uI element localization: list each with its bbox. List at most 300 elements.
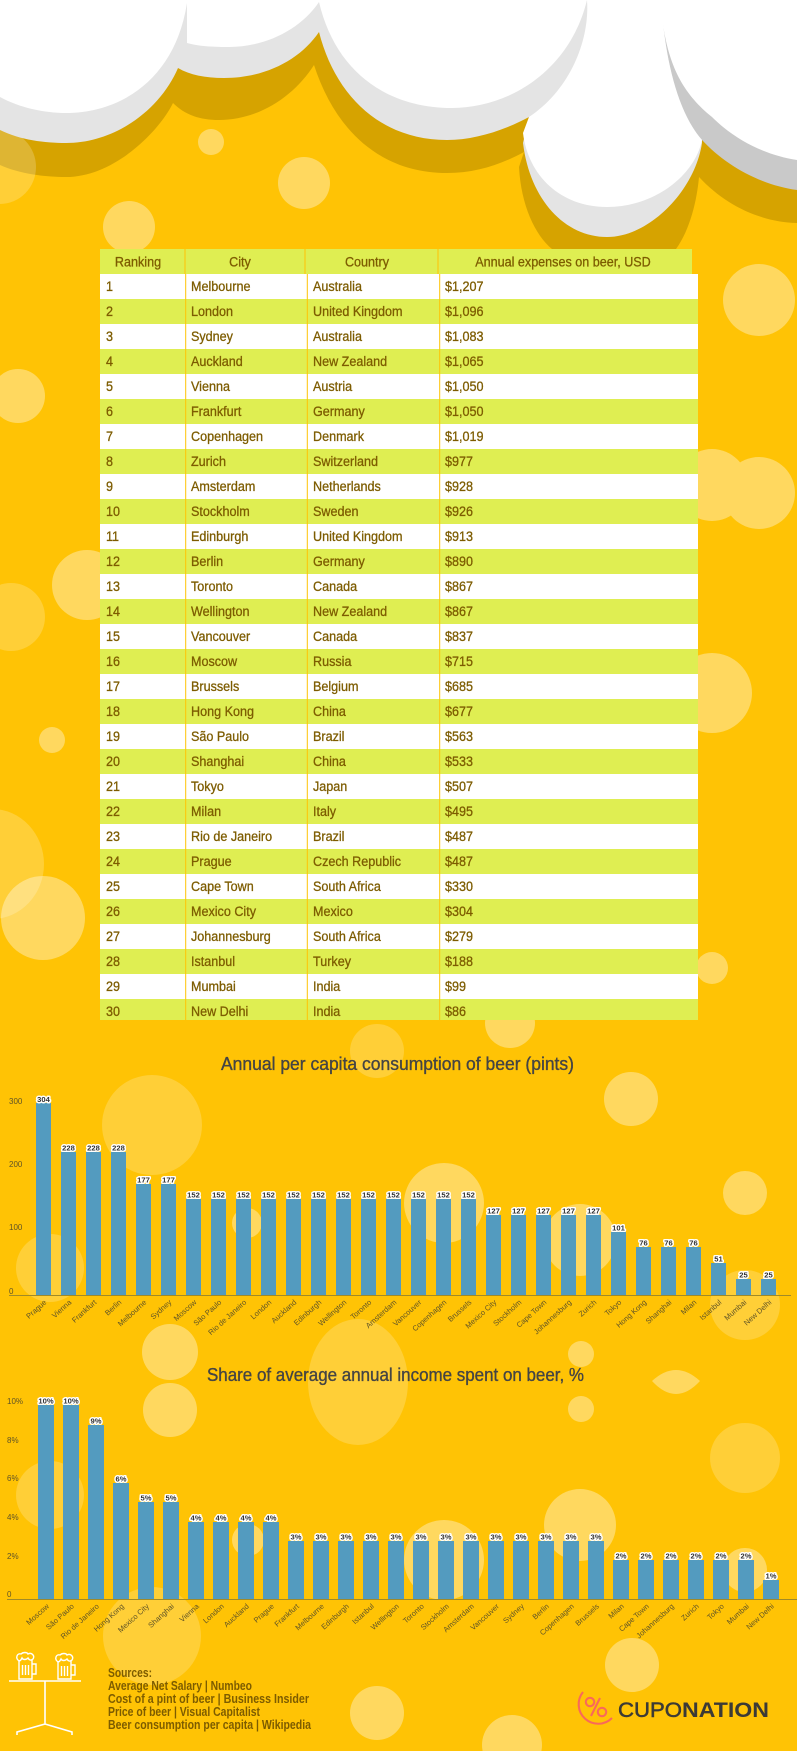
value labels: 152 — [412, 1190, 425, 1200]
row 9: Netherlands — [313, 478, 381, 494]
row 27 — [100, 924, 698, 949]
row 8: Switzerland — [313, 453, 378, 469]
y axis ticks: 10% — [7, 1397, 23, 1406]
value labels: 5% — [166, 1494, 177, 1502]
row 25: $330 — [445, 878, 473, 894]
table header: Annual expenses on beer, USD — [475, 254, 651, 270]
value labels: 25 — [764, 1270, 773, 1280]
city labels: Rio de Janeiro — [59, 1602, 101, 1641]
value labels: 152 — [212, 1190, 225, 1200]
value labels: 2% — [666, 1552, 677, 1560]
value labels: 2% — [691, 1552, 702, 1560]
value labels: 152 — [312, 1190, 325, 1200]
value labels: 3% — [466, 1532, 477, 1542]
row 21: $507 — [445, 778, 473, 794]
row 3: Sydney — [191, 328, 233, 344]
row 12 — [100, 549, 698, 574]
row 26: 26 — [106, 903, 120, 919]
row 6: Frankfurt — [191, 403, 242, 419]
city labels: Toronto — [349, 1298, 373, 1321]
city labels: Melbourne — [293, 1602, 326, 1632]
row 25 — [100, 874, 698, 899]
city labels: Frankfurt — [70, 1297, 99, 1325]
row 24: $487 — [445, 853, 473, 869]
row 3: 3 — [106, 328, 113, 344]
row 13 — [100, 574, 698, 599]
table header — [100, 249, 692, 274]
row 13: 13 — [106, 578, 120, 594]
row 4: $1,065 — [445, 353, 483, 369]
sources text — [108, 1666, 312, 1732]
row 20: 20 — [106, 753, 120, 769]
city labels: Hong Kong — [614, 1298, 648, 1330]
value labels: 10% — [63, 1396, 79, 1406]
row 30: 30 — [106, 1003, 120, 1019]
y axis ticks — [7, 1397, 23, 1599]
icon: percent smile — [579, 1692, 612, 1724]
row 28: 28 — [106, 953, 120, 969]
row 17: $685 — [445, 678, 473, 694]
row 12: $890 — [445, 553, 473, 569]
row 4: 4 — [106, 353, 113, 369]
row 29: $99 — [445, 978, 466, 994]
row 19: $563 — [445, 728, 473, 744]
city labels: Amsterdam — [441, 1602, 476, 1634]
row 15: Vancouver — [191, 628, 251, 644]
city labels: São Paulo — [44, 1602, 76, 1632]
row 14: Wellington — [191, 603, 250, 619]
row 29: India — [313, 978, 341, 994]
row 5 — [100, 374, 698, 399]
city labels: Zurich — [679, 1602, 701, 1622]
value labels: 9% — [91, 1416, 102, 1426]
row 27: South Africa — [313, 928, 381, 944]
value labels: 152 — [437, 1190, 450, 1200]
row 6: $1,050 — [445, 403, 483, 419]
chart title: share of income: Share of average annual income spent on beer, % — [207, 1364, 584, 1385]
value labels — [37, 1095, 773, 1280]
row 25: 25 — [106, 878, 120, 894]
row 3: $1,083 — [445, 328, 483, 344]
value labels: 6% — [116, 1474, 127, 1484]
value labels: 152 — [362, 1190, 375, 1200]
row 14: 14 — [106, 603, 120, 619]
city labels: Wellington — [316, 1298, 348, 1328]
city labels: Stockholm — [491, 1298, 523, 1328]
row 26: Mexico City — [191, 903, 256, 919]
value labels: 3% — [566, 1532, 577, 1542]
city labels: Copenhagen — [538, 1602, 576, 1637]
row 28: Turkey — [313, 953, 351, 969]
row 1: $1,207 — [445, 278, 483, 294]
chart title: annual per capita consumption: Annual per capita consumption of beer (pints) — [221, 1053, 574, 1074]
row 19: Brazil — [313, 728, 344, 744]
row 29: Mumbai — [191, 978, 236, 994]
row 14 — [100, 599, 698, 624]
city labels: Milan — [606, 1602, 626, 1620]
row 23: $487 — [445, 828, 473, 844]
city labels: Edinburgh — [319, 1602, 351, 1631]
row 9: Amsterdam — [191, 478, 255, 494]
row 12: Germany — [313, 553, 365, 569]
city labels: Hong Kong — [92, 1602, 126, 1634]
row 23: Brazil — [313, 828, 344, 844]
row 20: $533 — [445, 753, 473, 769]
row 1: Melbourne — [191, 278, 250, 294]
row 16 — [100, 649, 698, 674]
row 5: Austria — [313, 378, 353, 394]
city labels: Mexico City — [116, 1602, 151, 1634]
row 13: $867 — [445, 578, 473, 594]
city labels: Vancouver — [391, 1297, 424, 1328]
value labels: 10% — [38, 1396, 54, 1406]
row 15: $837 — [445, 628, 473, 644]
city labels: Istanbul — [350, 1602, 376, 1626]
row 13: Toronto — [191, 578, 233, 594]
row 16: 16 — [106, 653, 120, 669]
row 10: 10 — [106, 503, 120, 519]
table header: Ranking — [115, 254, 161, 270]
y axis ticks: 6% — [7, 1474, 19, 1483]
row 18: 18 — [106, 703, 120, 719]
row 10: $926 — [445, 503, 473, 519]
value labels: 4% — [266, 1514, 277, 1522]
y axis ticks: 100 — [9, 1223, 23, 1232]
row 1: Australia — [313, 278, 363, 294]
city labels: Brussels — [446, 1298, 474, 1324]
row 21: Tokyo — [191, 778, 224, 794]
row 16: Moscow — [191, 653, 238, 669]
city labels: Edinburgh — [292, 1298, 323, 1327]
row 12: Berlin — [191, 553, 223, 569]
row 3: Australia — [313, 328, 363, 344]
sources text: Price of beer | Visual Capitalist — [108, 1705, 261, 1719]
city labels: Frankfurt — [273, 1601, 302, 1629]
city labels: Vienna — [178, 1601, 201, 1624]
row 24: Prague — [191, 853, 232, 869]
row 6: 6 — [106, 403, 113, 419]
row 19: 19 — [106, 728, 120, 744]
row 24: 24 — [106, 853, 120, 869]
value labels: 76 — [664, 1238, 673, 1248]
row 15: 15 — [106, 628, 120, 644]
row 8 — [100, 449, 698, 474]
row 16: Russia — [313, 653, 352, 669]
bars — [38, 1405, 779, 1599]
row 23 — [100, 824, 698, 849]
value labels: 51 — [714, 1254, 723, 1264]
value labels: 152 — [237, 1190, 250, 1200]
city labels: Cape Town — [617, 1602, 651, 1634]
row 18: Hong Kong — [191, 703, 254, 719]
city labels: Brussels — [573, 1602, 601, 1628]
row 11: 11 — [106, 528, 119, 544]
value labels: 3% — [416, 1532, 427, 1542]
row 9 — [100, 474, 698, 499]
row 15: Canada — [313, 628, 358, 644]
row 11: United Kingdom — [313, 528, 403, 544]
city labels: São Paulo — [192, 1298, 223, 1328]
city labels: Shanghai — [146, 1602, 176, 1630]
row 5: Vienna — [191, 378, 231, 394]
row 1: 1 — [106, 278, 113, 294]
row 26: Mexico — [313, 903, 353, 919]
city labels: Stockholm — [419, 1602, 451, 1632]
value labels: 3% — [341, 1532, 352, 1542]
value labels: 3% — [291, 1532, 302, 1542]
row 27: Johannesburg — [191, 928, 271, 944]
city labels: New Delhi — [744, 1602, 776, 1631]
value labels: 127 — [587, 1206, 600, 1216]
city labels: Melbourne — [116, 1298, 148, 1328]
sources text: Sources: — [108, 1666, 152, 1680]
row 7: $1,019 — [445, 428, 483, 444]
row 2: United Kingdom — [313, 303, 403, 319]
city labels: Toronto — [401, 1602, 426, 1625]
city labels: Berlin — [103, 1298, 123, 1317]
value labels: 76 — [689, 1238, 698, 1248]
value labels: 2% — [616, 1552, 627, 1560]
city labels: Milan — [679, 1298, 698, 1316]
icon: table with beer mugs — [9, 1652, 81, 1735]
y axis ticks — [9, 1097, 23, 1296]
row 12: 12 — [106, 553, 120, 569]
row 2 — [100, 299, 698, 324]
row 28: $188 — [445, 953, 473, 969]
value labels: 228 — [112, 1144, 125, 1152]
row 30: $86 — [445, 1003, 466, 1019]
row 21: Japan — [313, 778, 347, 794]
row 9: $928 — [445, 478, 473, 494]
value labels: 4% — [241, 1514, 252, 1522]
row 4: Auckland — [191, 353, 243, 369]
value labels — [38, 1396, 777, 1580]
row 6 — [100, 399, 698, 424]
value labels: 25 — [739, 1270, 748, 1280]
value labels: 152 — [187, 1190, 200, 1200]
y axis ticks: 2% — [7, 1552, 19, 1561]
row 20: China — [313, 753, 346, 769]
value labels: 152 — [287, 1190, 300, 1200]
city labels: Vienna — [50, 1297, 74, 1320]
city labels: Vancouver — [469, 1601, 501, 1632]
row 11: $913 — [445, 528, 473, 544]
row 18 — [100, 699, 698, 724]
row 22: $495 — [445, 803, 473, 819]
row 28 — [100, 949, 698, 974]
city labels — [24, 1601, 776, 1641]
beer foam at top — [0, 0, 797, 260]
city labels: New Delhi — [742, 1298, 774, 1327]
row 8: Zurich — [191, 453, 226, 469]
y axis ticks: 8% — [7, 1436, 19, 1445]
row 20 — [100, 749, 698, 774]
value labels: 152 — [387, 1190, 400, 1200]
table header: City — [229, 254, 251, 270]
row 14: $867 — [445, 603, 473, 619]
row 11 — [100, 524, 698, 549]
value labels: 152 — [337, 1190, 350, 1200]
row 17: Belgium — [313, 678, 358, 694]
row 19 — [100, 724, 698, 749]
row 25: Cape Town — [191, 878, 254, 894]
row 4: New Zealand — [313, 353, 387, 369]
city labels: Tokyo — [705, 1602, 726, 1622]
row 2: $1,096 — [445, 303, 483, 319]
row 30: India — [313, 1003, 341, 1019]
row 7: Denmark — [313, 428, 364, 444]
icon: beer mug 2 — [56, 1654, 75, 1679]
row 10: Sweden — [313, 503, 358, 519]
row 6: Germany — [313, 403, 365, 419]
row 22: Italy — [313, 803, 336, 819]
value labels: 228 — [87, 1144, 100, 1152]
row 24: Czech Republic — [313, 853, 401, 869]
value labels: 76 — [639, 1238, 648, 1248]
row 23: Rio de Janeiro — [191, 828, 272, 844]
city labels: Mumbai — [722, 1298, 749, 1322]
row 5: 5 — [106, 378, 113, 394]
row 26: $304 — [445, 903, 473, 919]
city labels: Auckland — [222, 1602, 251, 1629]
sources text: Beer consumption per capita | Wikipedia — [108, 1718, 312, 1732]
sources text: Cost of a pint of beer | Business Insider — [108, 1692, 309, 1706]
row 29: 29 — [106, 978, 120, 994]
table header: Country — [345, 254, 389, 270]
y axis ticks: 300 — [9, 1097, 23, 1106]
city labels: Istanbul — [698, 1298, 724, 1322]
value labels: 177 — [162, 1176, 175, 1184]
row 14: New Zealand — [313, 603, 387, 619]
value labels: 2% — [641, 1552, 652, 1560]
value labels: 3% — [541, 1532, 552, 1542]
logo: Cuponation — [579, 1692, 769, 1724]
row 15 — [100, 624, 698, 649]
city labels: Zurich — [577, 1298, 598, 1318]
city labels: Cape Town — [515, 1298, 548, 1330]
city labels: London — [201, 1602, 226, 1625]
row 22 — [100, 799, 698, 824]
city labels: Mexico City — [464, 1298, 499, 1330]
row 18: China — [313, 703, 346, 719]
row 4 — [100, 349, 698, 374]
row 8: $977 — [445, 453, 473, 469]
city labels: Berlin — [531, 1602, 551, 1621]
row 7: 7 — [106, 428, 113, 444]
value labels: 4% — [191, 1514, 202, 1522]
value labels: 177 — [137, 1176, 150, 1184]
row 24 — [100, 849, 698, 874]
city labels: Sydney — [149, 1298, 174, 1321]
value labels: 304 — [37, 1095, 51, 1104]
value labels: 3% — [516, 1532, 527, 1542]
city labels: Johannesburg — [532, 1298, 573, 1336]
row 9: 9 — [106, 478, 113, 494]
row 17: 17 — [106, 678, 120, 694]
city labels: Moscow — [24, 1601, 51, 1627]
value labels: 2% — [741, 1552, 752, 1560]
value labels: 2% — [716, 1552, 727, 1560]
y axis ticks: 4% — [7, 1513, 19, 1522]
row 18: $677 — [445, 703, 473, 719]
city labels: Auckland — [269, 1298, 298, 1325]
value labels: 5% — [141, 1494, 152, 1502]
sources text: Average Net Salary | Numbeo — [108, 1679, 252, 1693]
city labels: Wellington — [369, 1602, 401, 1632]
row 11: Edinburgh — [191, 528, 248, 544]
row 26 — [100, 899, 698, 924]
bar chart: pints per capita — [9, 1095, 791, 1337]
row 2: London — [191, 303, 233, 319]
ranking table — [100, 249, 698, 1020]
bar chart: share of income — [7, 1396, 797, 1641]
city labels: Tokyo — [603, 1298, 623, 1318]
value labels: 4% — [216, 1514, 227, 1522]
city labels: Johannesburg — [634, 1602, 676, 1640]
row 22: 22 — [106, 803, 120, 819]
value labels: 3% — [366, 1532, 377, 1542]
row 7 — [100, 424, 698, 449]
city labels — [24, 1297, 774, 1337]
city labels: Prague — [24, 1298, 48, 1321]
row 30: New Delhi — [191, 1003, 248, 1019]
value labels: 3% — [491, 1532, 502, 1542]
row 8: 8 — [106, 453, 113, 469]
row 29 — [100, 974, 698, 999]
value labels: 127 — [537, 1206, 550, 1216]
logo: Cuponation: NATION — [682, 1699, 769, 1722]
row 25: South Africa — [313, 878, 381, 894]
row 10 — [100, 499, 698, 524]
value labels: 152 — [262, 1190, 275, 1200]
value labels: 127 — [562, 1206, 575, 1216]
y axis ticks: 0 — [7, 1590, 12, 1599]
value labels: 127 — [487, 1206, 500, 1216]
logo: Cuponation: CUPO — [618, 1699, 682, 1722]
row 30 — [100, 999, 698, 1020]
row 19: São Paulo — [191, 728, 249, 744]
city labels: Sydney — [501, 1602, 526, 1625]
city labels: Mumbai — [725, 1602, 751, 1626]
value labels: 1% — [766, 1572, 777, 1580]
row 17: Brussels — [191, 678, 240, 694]
row 28: Istanbul — [191, 953, 235, 969]
value labels: 3% — [441, 1532, 452, 1542]
value labels: 3% — [391, 1532, 402, 1542]
row 13: Canada — [313, 578, 358, 594]
city labels: Shanghai — [644, 1298, 674, 1326]
value labels: 228 — [62, 1144, 75, 1152]
value labels: 152 — [462, 1190, 475, 1200]
city labels: London — [249, 1298, 273, 1321]
row 10: Stockholm — [191, 503, 250, 519]
city labels: Amsterdam — [364, 1298, 398, 1330]
value labels: 3% — [316, 1532, 327, 1542]
row 22: Milan — [191, 803, 221, 819]
row 1 — [100, 274, 698, 299]
row 16: $715 — [445, 653, 473, 669]
icon: beer mug 1 — [17, 1652, 36, 1679]
row 21: 21 — [106, 778, 120, 794]
y axis ticks: 200 — [9, 1160, 23, 1169]
row 20: Shanghai — [191, 753, 244, 769]
bars — [36, 1103, 776, 1295]
row 7: Copenhagen — [191, 428, 263, 444]
row 23: 23 — [106, 828, 120, 844]
city labels: Copenhagen — [410, 1298, 448, 1333]
row 5: $1,050 — [445, 378, 483, 394]
row 27: 27 — [106, 928, 120, 944]
